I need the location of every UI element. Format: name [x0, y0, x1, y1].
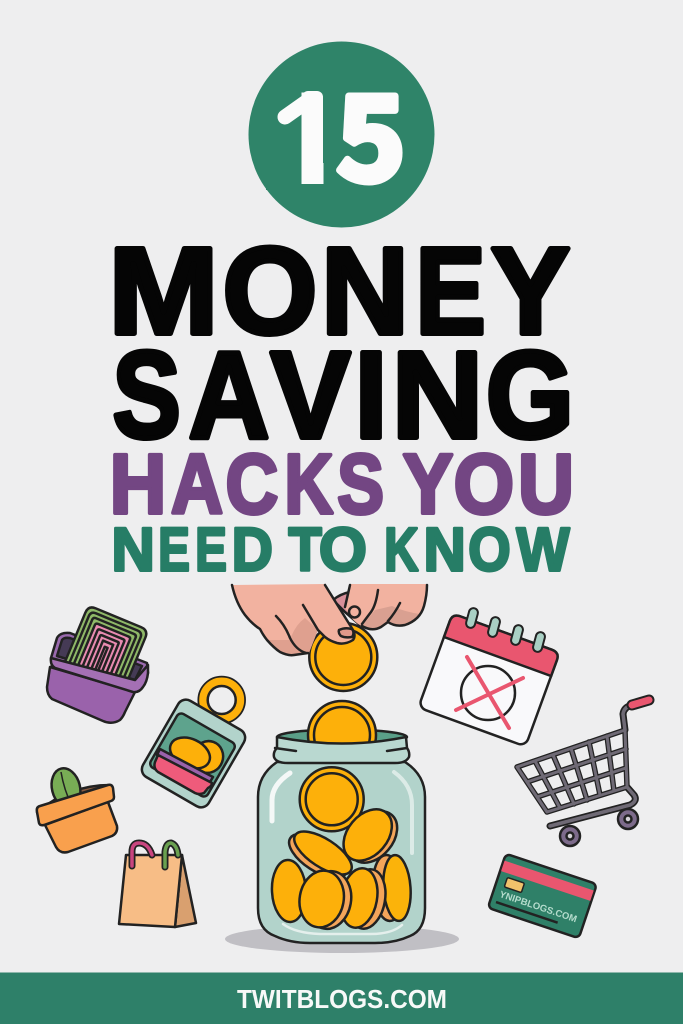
subtitle: hacks you: U [518, 437, 574, 531]
title: money saving: A [188, 326, 270, 464]
coin far left [270, 859, 308, 923]
icon: paper shopping bag [119, 843, 196, 927]
subtitle: hacks you: Y [403, 437, 453, 531]
title: money saving: N [321, 222, 409, 360]
subtitle: need to know: N [424, 516, 466, 584]
folded cash [65, 605, 148, 687]
subtitle: need to know [112, 516, 570, 584]
binder rings [465, 607, 546, 653]
number badge: 15: 1 [272, 44, 332, 214]
icon: calendar with crossed circle [418, 607, 560, 746]
subtitle: hacks you: K [284, 437, 333, 531]
coin upper right [334, 800, 407, 872]
window [148, 712, 237, 798]
jar rim [274, 737, 409, 763]
green handle [165, 843, 178, 867]
icon: coin held by hand [309, 623, 377, 691]
subtitle: hacks you: A [171, 437, 223, 531]
cart wheels [560, 809, 638, 846]
subtitle: hacks you [110, 437, 574, 531]
cart handle grip [632, 700, 649, 705]
subtitle: hacks you: C [226, 437, 278, 531]
subtitle: hacks you: S [337, 437, 384, 531]
pink handle [132, 843, 152, 866]
title: money saving: O [222, 222, 317, 360]
footer band [0, 972, 683, 1024]
icon: shopping cart [517, 700, 649, 846]
title: money saving: V [270, 326, 350, 464]
icon: credit card [488, 854, 597, 938]
frame [139, 696, 248, 811]
container rim [51, 658, 148, 692]
icon: glass jar with coins [258, 701, 425, 943]
subtitle: need to know: O [468, 516, 511, 584]
subtitle: need to know: N [112, 516, 155, 584]
title: money saving: N [392, 326, 483, 464]
container body [47, 667, 135, 723]
coin right [371, 854, 413, 922]
title: money saving: I [355, 326, 387, 464]
title: money saving: E [416, 222, 486, 360]
icon: potted plant [37, 765, 117, 852]
subtitle: hacks you: O [454, 437, 514, 531]
jar opening [277, 730, 407, 744]
large coin in jar [300, 767, 364, 831]
title: money saving: G [486, 326, 574, 464]
subtitle: need to know: T [288, 516, 322, 584]
ring [199, 677, 245, 723]
coin dropping into jar [308, 701, 376, 769]
pink wallet [154, 755, 212, 794]
footer band: TWITBLOGS.COM [237, 986, 447, 1014]
title: money saving: Y [491, 222, 570, 360]
coin center right [336, 865, 390, 932]
icon: hand [232, 584, 427, 655]
shadow under jar [225, 925, 459, 953]
container back rim [51, 633, 148, 692]
title: money saving: S [112, 326, 181, 464]
container interior [57, 638, 142, 680]
subtitle: need to know: K [384, 516, 418, 584]
subtitle: need to know: D [232, 516, 273, 584]
subtitle: need to know: O [319, 516, 367, 584]
subtitle: hacks you: H [110, 437, 166, 531]
jar highlights [272, 772, 412, 934]
number badge: 15 [248, 42, 434, 228]
coin left back [282, 823, 358, 887]
back coin [188, 737, 228, 777]
front coin [165, 731, 215, 775]
title: money saving: M [108, 222, 219, 360]
coin center [295, 867, 356, 932]
purple strip [157, 749, 213, 782]
subtitle: need to know: E [195, 516, 227, 584]
icon: credit card: YNIPBLOGS.COM [498, 889, 578, 925]
leaf [48, 765, 84, 811]
subtitle: need to know: W [516, 516, 570, 584]
title: money saving [108, 222, 574, 464]
subtitle: need to know: E [158, 516, 190, 584]
icon: money frame with ring [139, 677, 248, 811]
number badge: 15: 5 [336, 44, 406, 214]
icon: purple container with folded cash [47, 605, 148, 723]
jar body [258, 762, 425, 943]
